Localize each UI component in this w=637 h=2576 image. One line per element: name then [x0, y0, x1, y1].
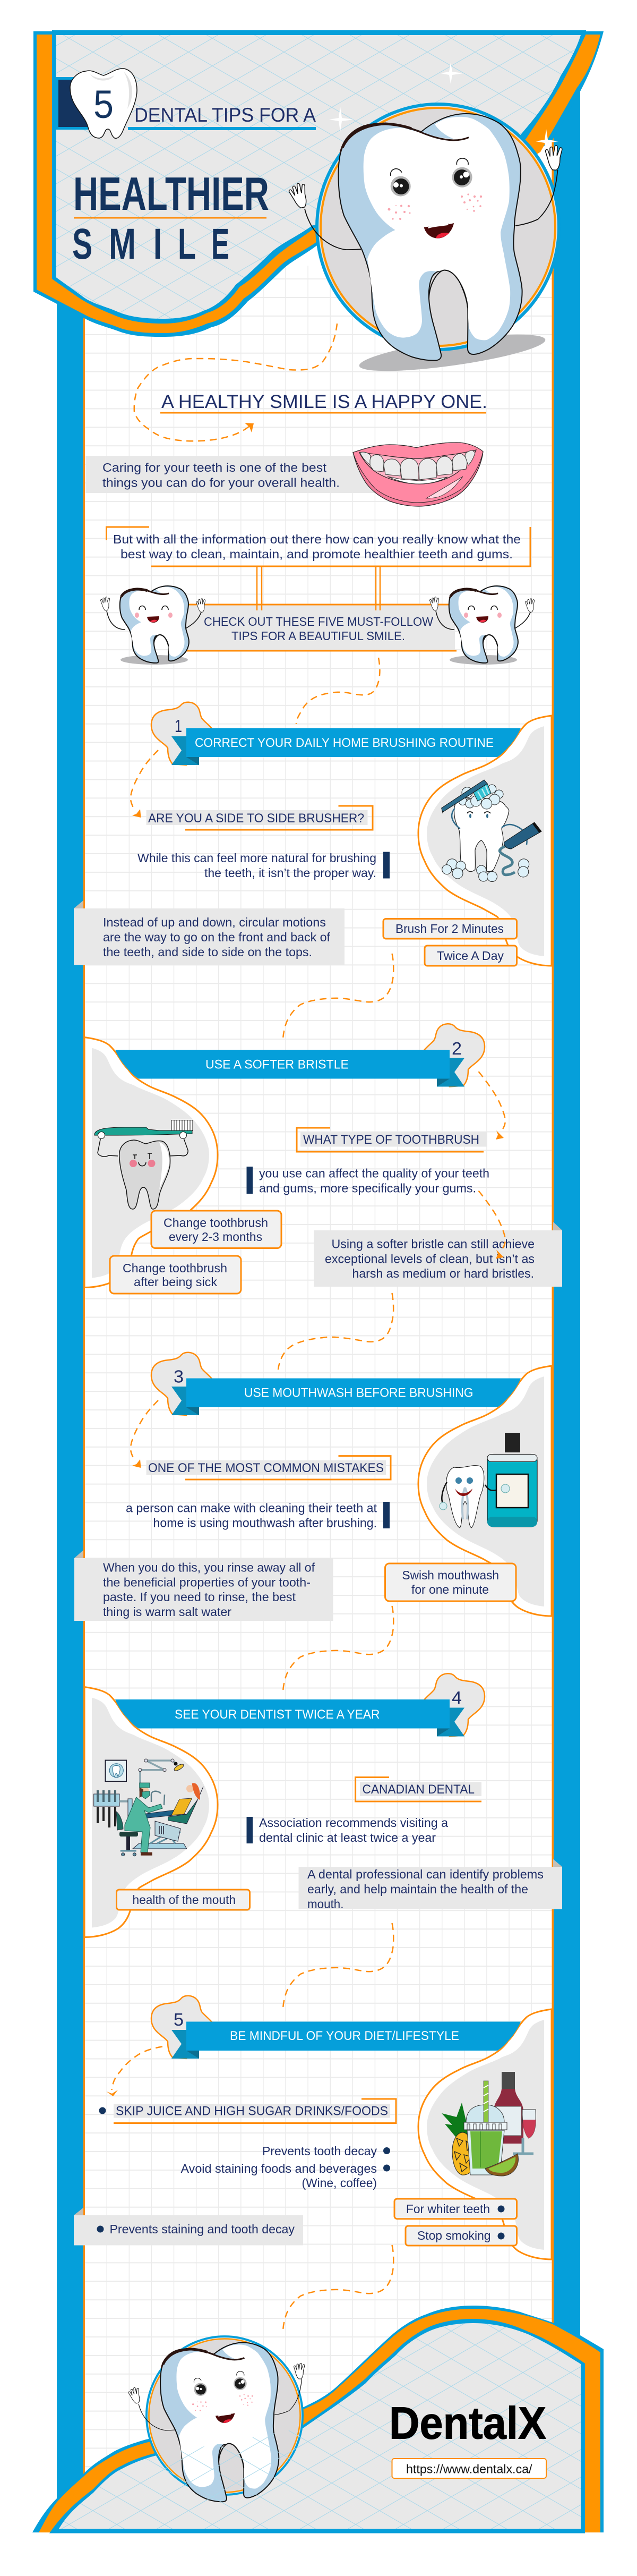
panel: check out banner: CHECK OUT THESE FIVE MUST-FOLLOW [204, 615, 433, 628]
arrow: tip 1 heading [131, 750, 158, 818]
text: tip 3 body: home is using mouthwash after brushing. [153, 1516, 377, 1530]
panel: tip 3 detail [74, 1550, 333, 1621]
text: tip 3 body [126, 1501, 390, 1530]
callout: change every 2-3 months [151, 1211, 281, 1248]
logo: DentalX: DentalX [389, 2398, 546, 2449]
panel: tip 4 header [84, 1673, 485, 1937]
panel: tip 2 header: 2 [452, 1039, 462, 1058]
panel: tip 5 detail: Prevents staining and tooth decay [109, 2222, 295, 2236]
text: tip 1 body: the teeth, it isn’t the proper way. [204, 866, 376, 880]
arrow: intro to tip 1 [296, 658, 380, 724]
icon: sparkles [329, 63, 558, 154]
panel: tip 4 header: SEE YOUR DENTIST TWICE A YEAR [175, 1708, 380, 1722]
callout: twice a day: Twice A Day [437, 949, 504, 963]
text: tip 1 body [137, 851, 390, 880]
callout: for whiter teeth [394, 2199, 517, 2219]
title line 3: S [72, 220, 92, 268]
text: tip 5 list: Avoid staining foods and beverages [180, 2162, 377, 2175]
panel: tip 3 header: USE MOUTHWASH BEFORE BRUSHING [244, 1387, 474, 1400]
panel: caring intro [85, 456, 378, 493]
panel: tip 1 detail: Instead of up and down, circular motions [103, 915, 326, 929]
panel: tip 4 detail: A dental professional can identify problems [307, 1867, 544, 1881]
heading: tip 4 question [356, 1778, 481, 1801]
heading: tip 2 question [297, 1128, 487, 1152]
text: tip 2 body [246, 1167, 489, 1195]
callout: health of the mouth [117, 1890, 249, 1910]
heading: tip 5 question [99, 2099, 396, 2123]
heading: tip 4 question: CANADIAN DENTAL [362, 1782, 475, 1797]
number badge: 5 [93, 82, 114, 126]
callout: stop smoking: Stop smoking [417, 2229, 490, 2242]
heading: tip 3 question: ONE OF THE MOST COMMON MISTAKES [148, 1461, 384, 1475]
heading: tip 1 question [147, 806, 373, 830]
title line 3: E [211, 220, 229, 268]
panel: tip 1 detail: the teeth, and side to side on the tops. [103, 945, 312, 959]
title line 1: DENTAL TIPS FOR A [134, 104, 316, 126]
callout: swish one minute [385, 1563, 516, 1601]
panel: check out banner [183, 600, 457, 651]
panel: tip 5 detail [74, 2208, 303, 2245]
panel: tip 5 header: BE MINDFUL OF YOUR DIET/LIFESTYLE [230, 2029, 459, 2043]
panel: question bracket: But with all the information out there how can you really know what the [113, 532, 521, 546]
instrument tray [94, 1790, 132, 1830]
panel: tip 2 detail: exceptional levels of clean, but isn’t as [325, 1252, 535, 1265]
panel: tip 3 detail: When you do this, you rinse away all of [103, 1561, 315, 1575]
wall tooth picture [105, 1761, 126, 1781]
panel: tip 2 detail: Using a softer bristle can still achieve [331, 1237, 535, 1251]
heading: tip 1 question: ARE YOU A SIDE TO SIDE BRUSHER? [148, 811, 364, 826]
panel: tip 1 header: 1 [175, 716, 182, 736]
panel: caring intro: Caring for your teeth is one of the best [102, 461, 327, 474]
callout: twice a day [425, 946, 517, 966]
icon: footer mascot tooth [128, 2335, 305, 2502]
panel: tip 4 detail: mouth. [307, 1897, 344, 1911]
heading: tip 5 question: SKIP JUICE AND HIGH SUGAR DRINKS/FOODS [116, 2104, 388, 2119]
tooth shadow [357, 327, 547, 378]
text: tip 5 list [180, 2144, 390, 2190]
panel: check out banner: TIPS FOR A BEAUTIFUL SMILE. [231, 629, 405, 643]
callout: change every 2-3 months: every 2-3 months [169, 1230, 262, 1244]
panel: tip 4 header: 4 [452, 1688, 462, 1707]
text: tip 5 list: (Wine, coffee) [302, 2176, 377, 2190]
callout: change every 2-3 months: Change toothbrush [163, 1215, 268, 1229]
callout: stop smoking [406, 2226, 517, 2246]
arrow: tip 4 to tip 5 [283, 1923, 393, 2009]
arrow: tip 5 to footer [283, 2245, 393, 2331]
icon: drinks and fruit [442, 2072, 536, 2176]
lattice overlay on footer mascot [157, 2428, 304, 2507]
panel: question bracket [106, 527, 530, 610]
panel: caring intro: things you can do for your overall health. [102, 476, 340, 490]
arrow: tip 2 to tip 3 [278, 1293, 393, 1370]
dentist [119, 1783, 165, 1856]
arrow: tip 3 to tip 4 [283, 1606, 393, 1692]
text: tip 4 body [246, 1816, 448, 1844]
arrow: tip 1 to tip 2 [283, 954, 393, 1040]
number badge [52, 69, 137, 138]
icon: mascot tooth [288, 103, 562, 361]
panel: tip 1 detail [74, 900, 345, 965]
callout: change after being sick: Change toothbrush [123, 1261, 227, 1275]
arrow: tip 3 heading [131, 1400, 158, 1468]
panel: tip 3 detail: paste. If you need to rinse, the best [103, 1590, 296, 1604]
text: tip 2 body: and gums, more specifically your gums. [259, 1181, 476, 1195]
text: tip 3 body: a person can make with cleaning their teeth at [126, 1501, 377, 1515]
title line 3: L [178, 220, 196, 268]
callout: for whiter teeth: For whiter teeth [406, 2202, 490, 2216]
icon: tooth with mouthwash [440, 1433, 537, 1528]
panel: tip 3 header [151, 1353, 552, 1616]
text: tip 4 body: Association recommends visiting a [259, 1816, 448, 1830]
panel: tip 4 detail [298, 1859, 562, 1911]
callout: swish one minute: Swish mouthwash [402, 1568, 499, 1582]
left side band [57, 297, 85, 2507]
panel: tip 4 detail: early, and help maintain the health of the [307, 1882, 528, 1896]
icon: small tooth right [429, 586, 535, 665]
heading: tagline: A HEALTHY SMILE IS A HAPPY ONE. [161, 391, 487, 412]
right side band [552, 85, 580, 2348]
panel: tip 2 detail: harsh as medium or hard bristles. [352, 1266, 534, 1280]
icon: tooth lifting toothbrush [94, 1120, 193, 1209]
panel: tip 3 detail: the beneficial properties of your tooth- [103, 1576, 311, 1589]
panel: tip 2 header: USE A SOFTER BRISTLE [205, 1058, 349, 1072]
text: tip 2 body: you use can affect the quality of your teeth [259, 1167, 489, 1180]
panel: tip 5 header [151, 1996, 552, 2259]
heading: tip 2 question: WHAT TYPE OF TOOTHBRUSH [303, 1133, 479, 1147]
panel: tip 1 header: CORRECT YOUR DAILY HOME BRUSHING ROUTINE [195, 736, 494, 750]
chair base [133, 1821, 187, 1849]
title line 3: I [153, 220, 162, 268]
icon: smiling lips [353, 443, 483, 506]
callout: health of the mouth: health of the mouth [133, 1893, 236, 1907]
text: tip 4 body: dental clinic at least twice a year [259, 1831, 436, 1844]
heading: tip 3 question [147, 1456, 391, 1480]
arrow: tip 5 heading [106, 2046, 162, 2096]
panel: tip 3 detail: thing is warm salt water [103, 1605, 231, 1619]
text: tip 5 list: Prevents tooth decay [262, 2144, 377, 2158]
panel: tip 3 header: 3 [174, 1366, 184, 1387]
callout: change after being sick [110, 1256, 241, 1294]
panel: question bracket: best way to clean, maintain, and promote healthier teeth and gums. [120, 547, 513, 561]
panel: tip 2 header [84, 1024, 485, 1288]
header frame [33, 30, 604, 337]
callout: brush 2 minutes: Brush For 2 Minutes [395, 922, 504, 936]
panel: tip 5 header: 5 [174, 2010, 184, 2029]
footer frame [32, 2306, 604, 2533]
text: tip 1 body: While this can feel more natural for brushing [137, 851, 376, 865]
panel: tip 1 header [151, 702, 552, 966]
arrow: tip 4 heading [479, 1191, 505, 1259]
callout: swish one minute: for one minute [411, 1583, 489, 1596]
icon: small tooth left [100, 586, 205, 665]
arrow: tip 2 heading [479, 1072, 505, 1140]
callout: change after being sick: after being sick [134, 1275, 217, 1289]
patient [142, 1783, 203, 1824]
callout: website url: https://www.dentalx.ca/ [406, 2462, 532, 2476]
dental lamp [139, 1759, 185, 1791]
panel: tip 2 detail [314, 1222, 562, 1287]
icon: dentist treating patient [94, 1759, 203, 1856]
title line 3 [72, 220, 229, 268]
arrow: tooth to tagline [134, 324, 337, 441]
icon: tooth brushing [442, 780, 541, 882]
title line 3: M [109, 220, 136, 268]
panel: tip 1 detail: are the way to go on the front and back of [103, 930, 331, 944]
background grid paper [85, 266, 552, 2497]
callout: brush 2 minutes [383, 919, 517, 939]
callout: website url [392, 2459, 546, 2478]
title line 2: HEALTHIER [73, 167, 269, 220]
title block [52, 69, 316, 268]
